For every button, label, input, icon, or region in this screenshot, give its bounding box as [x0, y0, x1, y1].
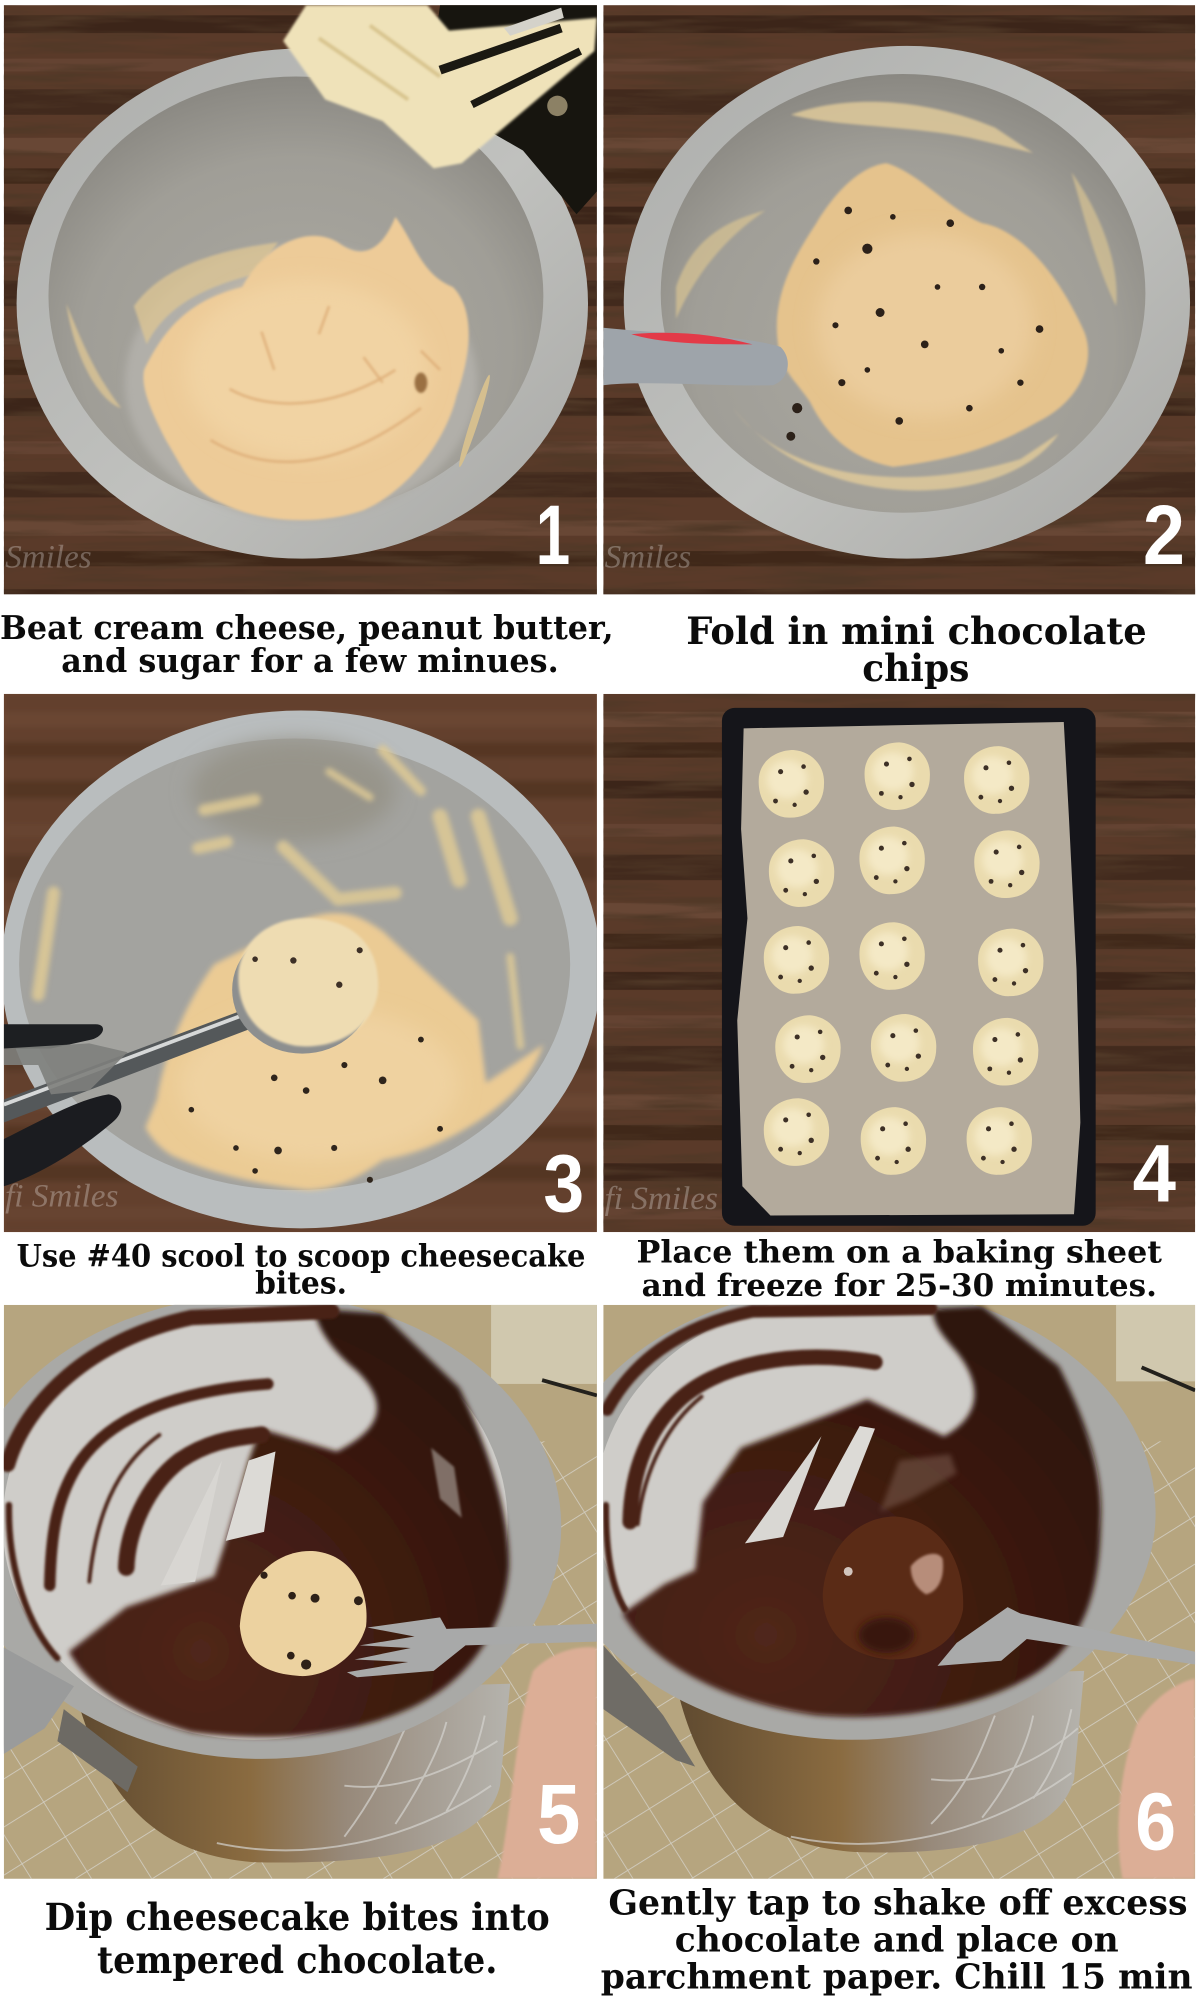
caption: step 6: Gently tap to shake off excess — [608, 1884, 1187, 1924]
watermark: fi Smiles — [605, 1180, 718, 1217]
cheesecake ball on fork — [240, 1551, 367, 1676]
step number 3: 3 — [543, 1139, 584, 1230]
chocolate coated ball — [823, 1517, 963, 1660]
step number 2: 2 — [1143, 488, 1185, 582]
cheesecake balls — [759, 742, 1043, 1175]
caption: step 4: Place them on a baking sheet — [636, 1235, 1163, 1271]
watermark: Smiles — [5, 539, 92, 576]
panel: step 5 photo — [0, 1295, 597, 1879]
icon: mixing bowl — [624, 46, 1190, 559]
panel: step 2 photo — [603, 5, 1195, 594]
icon: electric mixer and beaters — [283, 5, 597, 214]
icon: baking sheet — [722, 708, 1096, 1226]
watermark: Smiles — [605, 539, 691, 576]
caption: step 2: chips — [862, 646, 969, 690]
caption: step 5: tempered chocolate. — [97, 1938, 497, 1982]
caption: step 6: parchment paper. Chill 15 min — [601, 1958, 1193, 1998]
dough mound — [143, 217, 493, 520]
cooling rack — [4, 1441, 597, 1879]
parchment paper — [737, 722, 1080, 1216]
caption: step 3: bites. — [255, 1265, 347, 1301]
cooling rack — [603, 1441, 1195, 1879]
panel: step 1 photo — [4, 5, 597, 594]
step number 6: 6 — [1135, 1776, 1176, 1867]
panel: step 6 photo — [603, 1304, 1196, 1879]
panel: step 4 photo — [603, 694, 1195, 1232]
hand finger — [1118, 1679, 1195, 1879]
caption: step 4: and freeze for 25-30 minutes. — [642, 1268, 1157, 1304]
icon: fork — [347, 1617, 597, 1677]
dough with chocolate chips — [777, 163, 1088, 467]
icon: cookie scoop with ball — [4, 918, 378, 1186]
caption: step 6: chocolate and place on — [675, 1921, 1119, 1961]
hand finger — [497, 1647, 597, 1879]
caption: step 3: Use #40 scool to scoop cheesecake — [17, 1239, 585, 1275]
step number 5: 5 — [537, 1767, 580, 1861]
watermark: fi Smiles — [5, 1178, 118, 1215]
caption: step 5: Dip cheesecake bites into — [45, 1895, 550, 1939]
step number 1: 1 — [536, 488, 570, 582]
dough with chocolate chips — [145, 913, 543, 1190]
icon: fork — [938, 1607, 1195, 1666]
melted chocolate — [606, 1306, 1101, 1717]
panel: step 3 photo — [1, 694, 601, 1232]
icon: saucepan — [0, 1295, 561, 1863]
caption: step 2: Fold in mini chocolate — [686, 609, 1147, 653]
icon: mixing bowl — [1, 710, 601, 1228]
caption: step 1: and sugar for a few minues. — [61, 641, 559, 680]
icon: saucepan — [603, 1304, 1156, 1852]
step number 4: 4 — [1133, 1129, 1176, 1220]
melted chocolate — [8, 1309, 509, 1737]
caption: step 1: Beat cream cheese, peanut butter, — [0, 608, 614, 647]
icon: mixing bowl — [17, 48, 588, 559]
icon: spatula — [603, 328, 788, 385]
